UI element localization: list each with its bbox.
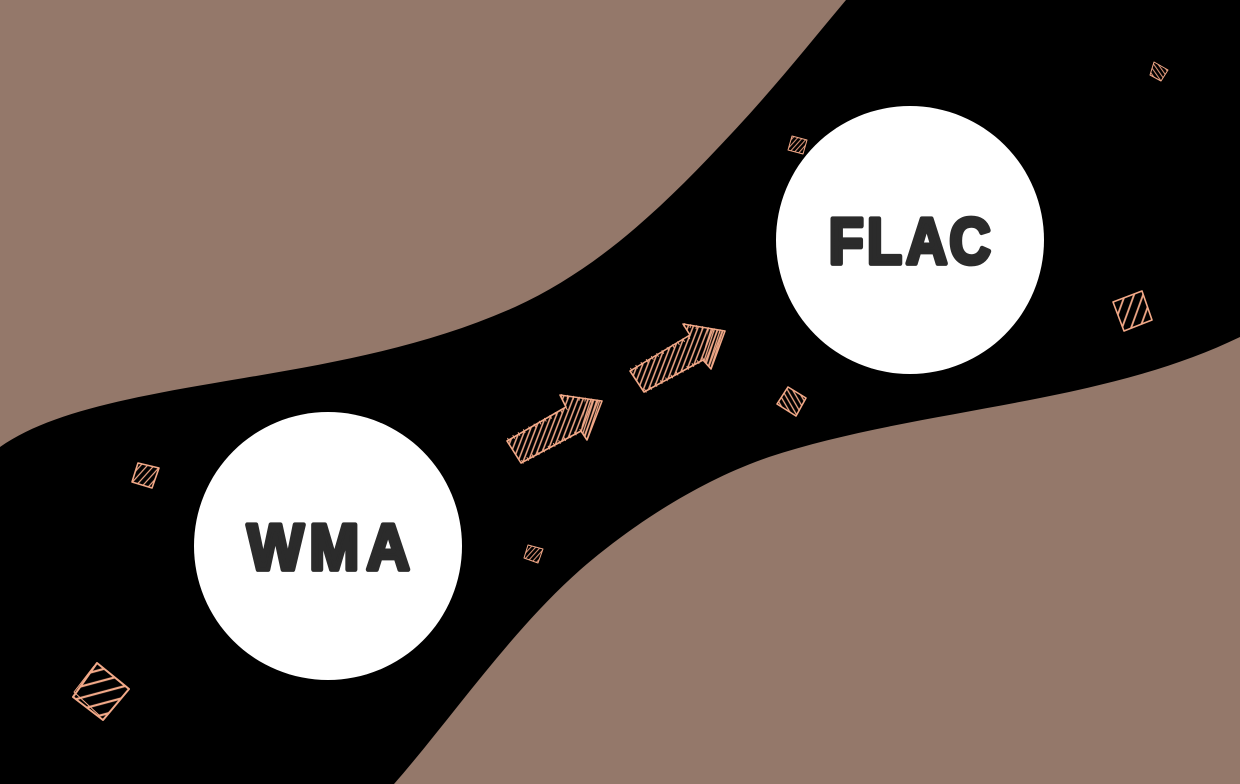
icon: small hatched square top bbox=[788, 136, 807, 154]
label: FLAC: FLAC bbox=[829, 205, 991, 277]
icon: hatched square below arrows bbox=[777, 387, 806, 416]
icon: hatched square right bbox=[1113, 291, 1152, 331]
icon: hatched square left bbox=[132, 463, 159, 488]
arrow: lower sketched arrow bbox=[507, 395, 602, 463]
arrow: upper sketched arrow bbox=[630, 324, 725, 392]
circle: FLAC bbox=[776, 106, 1044, 374]
icon: large hatched square bottom left bbox=[73, 663, 129, 720]
icon: small hatched square centre bbox=[524, 545, 543, 563]
label: WMA: WMA bbox=[247, 511, 410, 584]
circle: WMA bbox=[194, 412, 462, 680]
icon: small hatched square top right bbox=[1150, 62, 1168, 81]
